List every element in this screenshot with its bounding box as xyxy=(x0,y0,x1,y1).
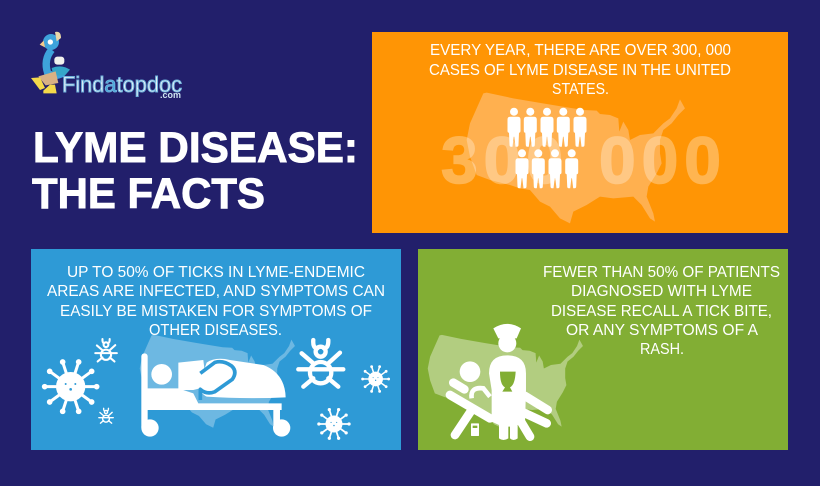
icon: patient in bed xyxy=(141,353,290,437)
text: cases statement: CASES OF LYME DISEASE IN THE UNITED xyxy=(429,62,731,79)
text: cases statement: STATES. xyxy=(552,81,609,98)
map: USA xyxy=(140,335,295,428)
text: ticks statement xyxy=(47,264,385,339)
text: recall statement: DISEASE RECALL A TICK BITE, xyxy=(551,303,772,320)
icon: people xyxy=(508,108,586,188)
icon: duck mascot xyxy=(31,32,70,93)
icon: small virus bottom xyxy=(319,410,349,438)
icon: medium tick xyxy=(95,339,117,361)
text: recall statement: RASH. xyxy=(640,341,684,358)
icon: large tick xyxy=(298,340,343,387)
big number xyxy=(441,123,721,197)
text: recall statement: DIAGNOSED WITH LYME xyxy=(571,283,752,300)
text: cases statement: EVERY YEAR, THERE ARE OVER 300, 000 xyxy=(430,42,731,59)
text: ticks statement: EASILY BE MISTAKEN FOR SYMPTOMS OF xyxy=(60,303,372,320)
panel: green, tick bite recall xyxy=(418,249,788,450)
logo: Findatopdoc xyxy=(31,32,182,100)
text: recall statement xyxy=(543,264,780,358)
panel: orange, cases per year xyxy=(372,32,788,233)
title: LYME DISEASE: xyxy=(33,124,358,172)
logo .com: .com xyxy=(160,90,181,100)
text: ticks statement: UP TO 50% OF TICKS IN LYME-ENDEMIC xyxy=(67,264,365,281)
logo wordmark: Findatopdoc xyxy=(62,72,182,97)
big number: 000 xyxy=(599,123,721,197)
big number: 300 xyxy=(441,123,563,197)
icon: large virus xyxy=(45,362,97,411)
map: USA xyxy=(428,335,583,428)
text: ticks statement: OTHER DISEASES. xyxy=(149,322,282,339)
text: ticks statement: AREAS ARE INFECTED, AND SYMPTOMS CAN xyxy=(47,283,385,300)
title xyxy=(32,124,358,218)
text: cases statement xyxy=(429,42,731,98)
icon: small virus right xyxy=(363,367,389,391)
text: recall statement: FEWER THAN 50% OF PATIENTS xyxy=(543,264,780,281)
text: recall statement: OR ANY SYMPTOMS OF A xyxy=(566,322,758,339)
panel: blue, infected ticks xyxy=(31,249,401,450)
map: USA xyxy=(467,93,685,223)
title: THE FACTS xyxy=(32,170,265,218)
icon: nurse tending patient xyxy=(450,324,548,440)
icon: small tick xyxy=(99,408,113,423)
